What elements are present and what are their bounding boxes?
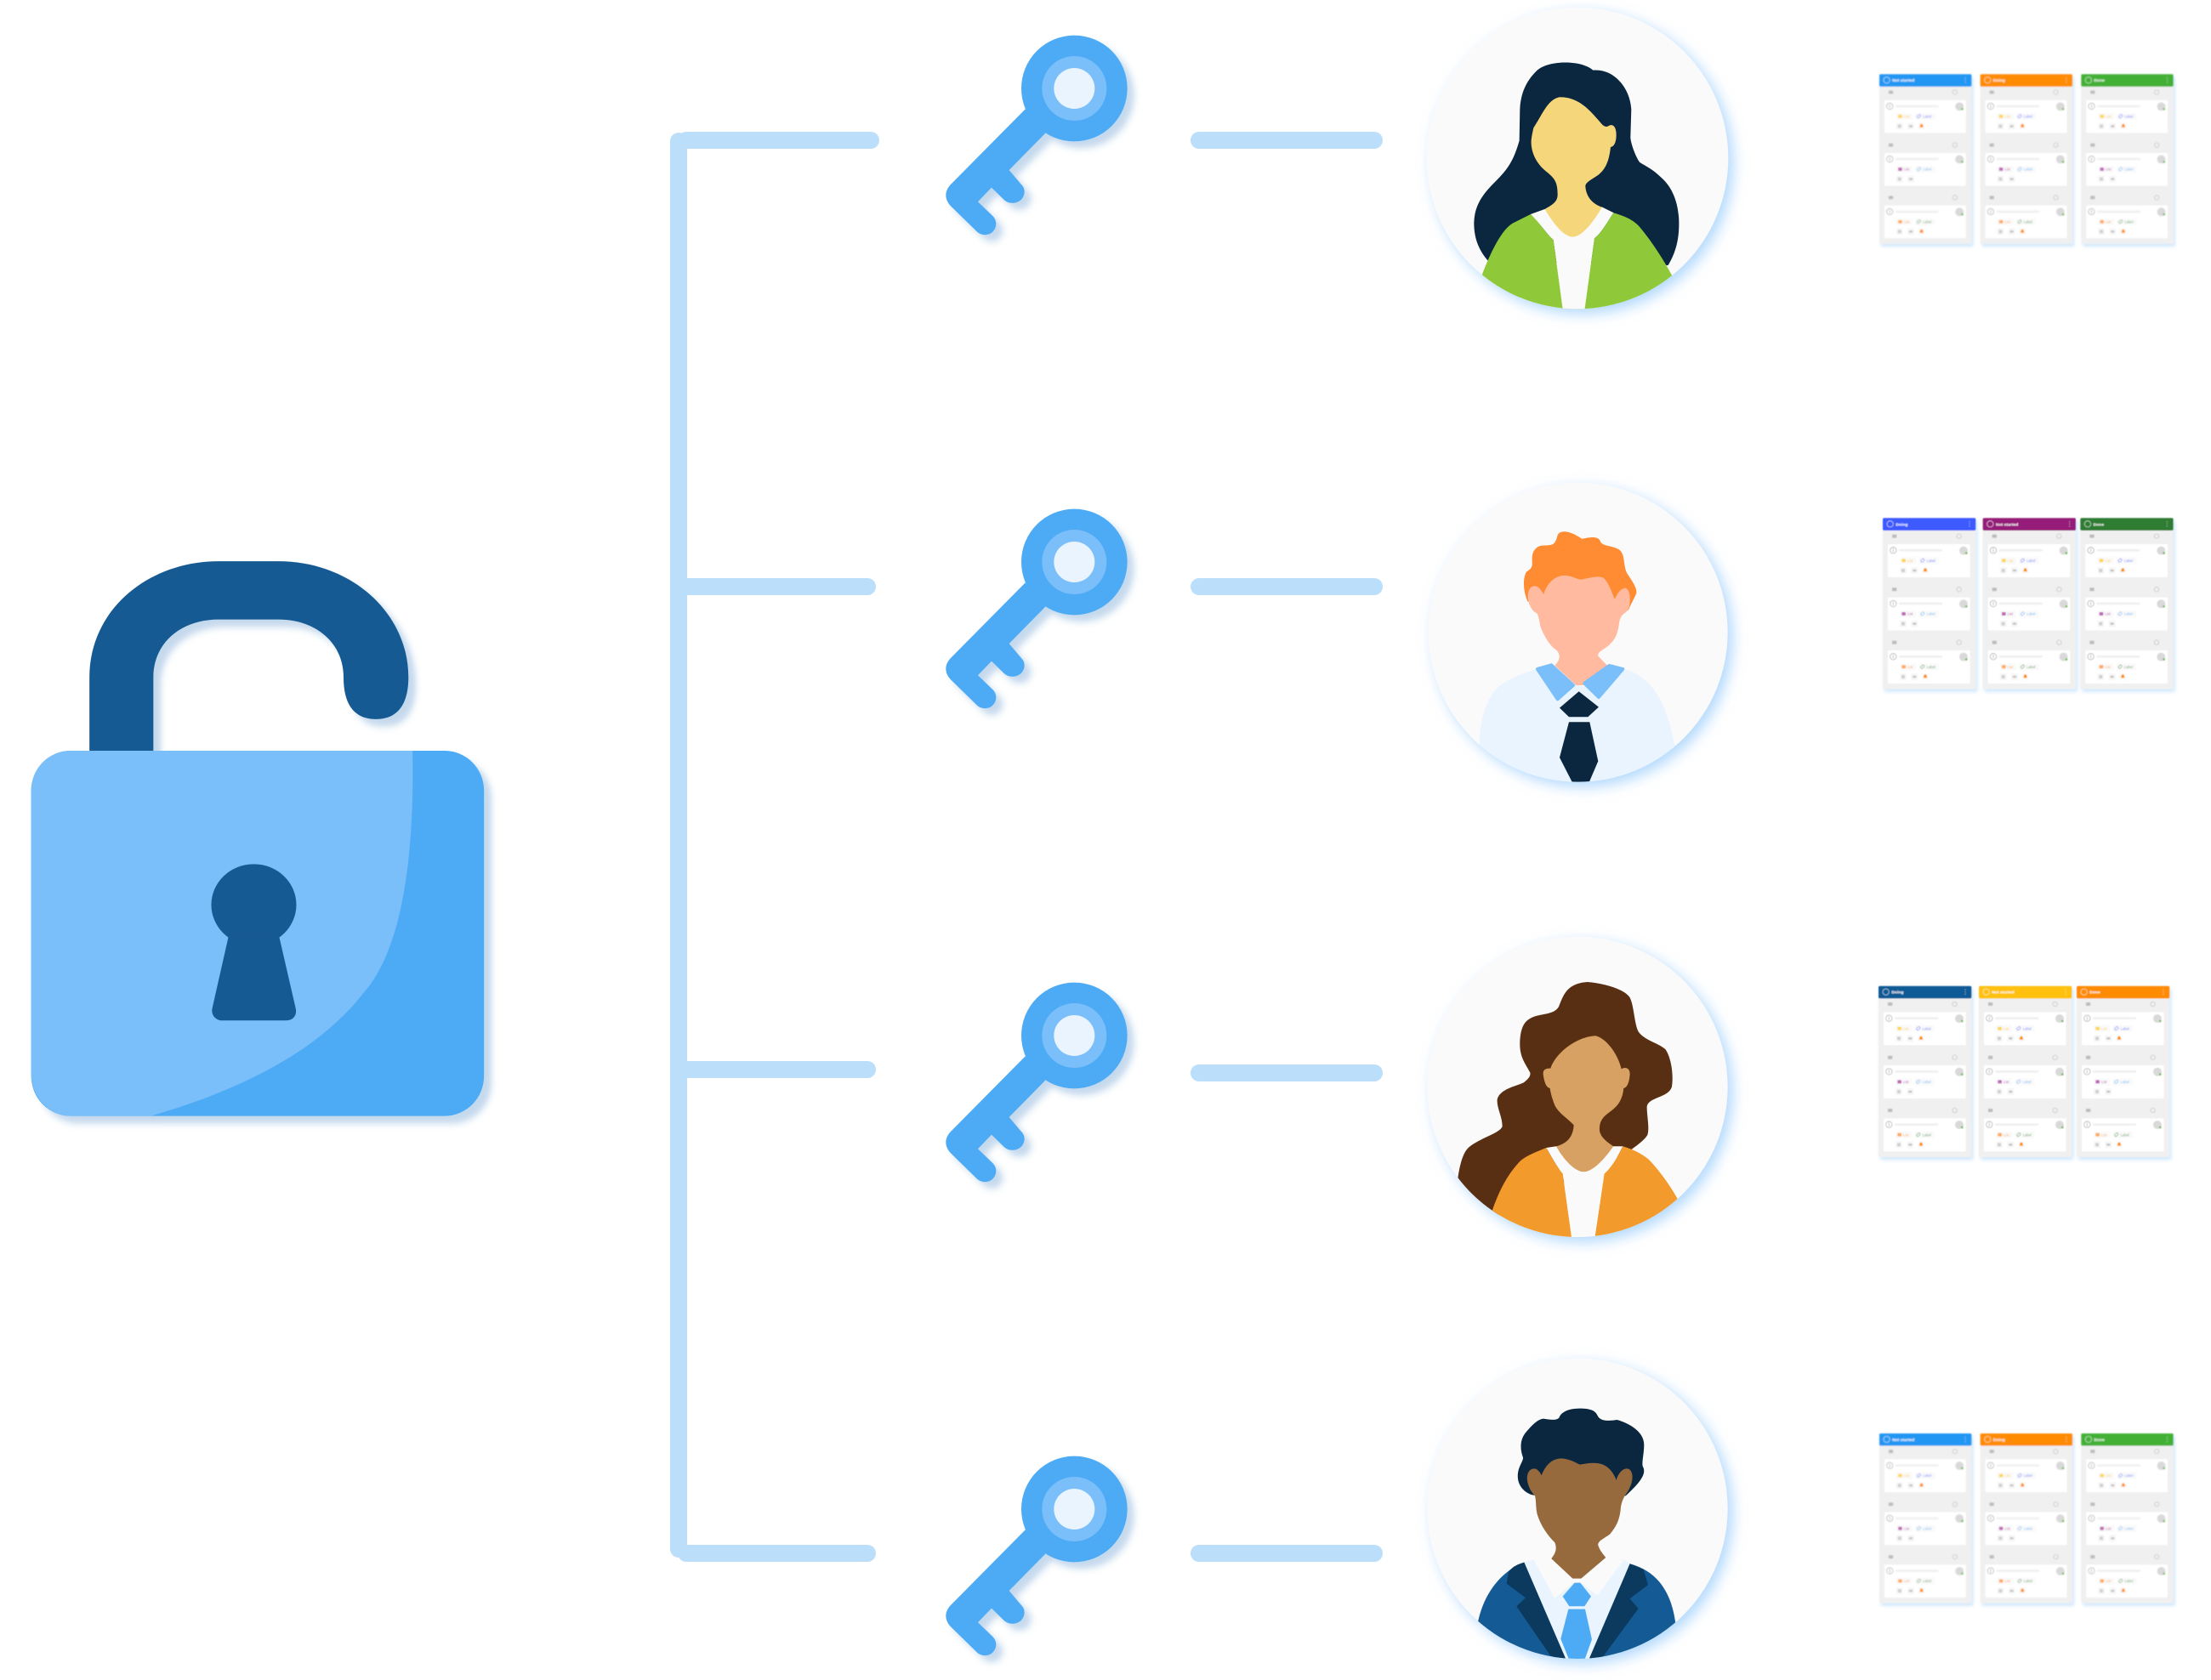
column: done (orange): List — [2101, 1132, 2107, 1137]
column: done (green) — [2081, 74, 2174, 244]
column: done (orange) — [2077, 986, 2169, 1157]
key 1 — [946, 36, 1128, 235]
column: not started (blue): Label — [1923, 1526, 1931, 1530]
board 4: three task columns — [1879, 1433, 2174, 1603]
column: not started (blue): Label — [1923, 167, 1931, 172]
key 4 — [946, 1456, 1128, 1655]
padlock — [31, 561, 484, 1116]
lock shackle — [89, 561, 408, 753]
key 3 — [946, 983, 1128, 1182]
column: not started (amber): Label — [2023, 1026, 2032, 1030]
column: not started (blue): List — [1904, 1579, 1910, 1583]
column: doing (navy): List — [1903, 1132, 1909, 1137]
column: not started (blue): Label — [1923, 1473, 1931, 1478]
column: done (orange): List — [2101, 1080, 2107, 1084]
column: doing (orange): Label — [2024, 167, 2032, 172]
column: done (green): List — [2106, 219, 2112, 224]
column: doing (orange): Label — [2024, 1526, 2032, 1530]
column: done (dark green) — [2080, 518, 2174, 690]
column: not started (amber): Not started — [1992, 990, 2015, 996]
column: not started (purple): Label — [2026, 612, 2036, 616]
column: doing (orange): List — [2004, 1473, 2011, 1478]
column: done (green): Label — [2125, 167, 2134, 172]
column: doing (orange): Label — [2024, 1473, 2032, 1478]
column: not started (amber): Label — [2023, 1132, 2032, 1137]
avatar: man in dark suit with blue tie — [1427, 1359, 1728, 1663]
column: doing (navy): Label — [1923, 1132, 1931, 1137]
column: done (dark green): List — [2105, 665, 2112, 669]
column: doing (indigo): Label — [1927, 665, 1935, 669]
column: not started (blue): List — [1904, 1473, 1910, 1478]
column: doing (navy): Label — [1923, 1026, 1931, 1030]
column: done (dark green): List — [2105, 559, 2112, 563]
column: not started (purple): Not started — [1996, 522, 2018, 527]
board 1: three task columns — [1879, 74, 2174, 244]
column: not started (amber): List — [2004, 1080, 2009, 1084]
column: not started (purple): Label — [2026, 665, 2036, 669]
column: done (green): Done — [2094, 1438, 2105, 1443]
board 3: three task columns — [1878, 986, 2169, 1157]
column: not started (purple): List — [2008, 612, 2014, 616]
avatar: woman with dark hair and green jacket — [1427, 8, 1728, 314]
column: doing (orange): Doing — [1993, 78, 2005, 83]
column: done (green): Label — [2125, 1526, 2134, 1530]
column: not started (blue): List — [1904, 219, 1910, 224]
column: done (green): List — [2106, 167, 2112, 172]
column: not started (blue): List — [1904, 1526, 1910, 1530]
column: doing (orange): List — [2004, 1579, 2011, 1583]
column: doing (indigo) — [1883, 518, 1975, 690]
column: not started (purple) — [1983, 518, 2076, 690]
connectors from keys to users — [1191, 132, 1383, 1562]
column: doing (orange): List — [2004, 115, 2011, 119]
column: not started (blue): Label — [1923, 219, 1931, 224]
column: done (dark green): List — [2105, 612, 2112, 616]
column: doing (orange): Label — [2024, 1579, 2032, 1583]
column: doing (orange): List — [2004, 1526, 2011, 1530]
column: done (green): List — [2106, 1579, 2112, 1583]
column: not started (purple): List — [2008, 665, 2014, 669]
avatar: woman with brown hair and orange jacket — [1427, 937, 1728, 1241]
avatar: man with orange hair and tie — [1429, 483, 1728, 789]
board 2: three task columns — [1883, 518, 2174, 690]
column: done (green): Label — [2125, 115, 2134, 119]
key 2 — [946, 509, 1128, 708]
column: doing (indigo): List — [1907, 665, 1913, 669]
column: not started (amber) — [1979, 986, 2072, 1157]
column: doing (navy): List — [1903, 1026, 1909, 1030]
column: done (green): Label — [2125, 219, 2134, 224]
column: not started (amber): Label — [2023, 1080, 2032, 1084]
column: not started (blue): List — [1904, 115, 1910, 119]
branching connector from lock to keys — [670, 132, 879, 1562]
column: done (green): List — [2106, 115, 2112, 119]
column: not started (blue): List — [1904, 167, 1910, 172]
column: doing (navy): Doing — [1891, 990, 1903, 996]
column: done (green) — [2081, 1433, 2174, 1603]
column: doing (orange) — [1981, 74, 2072, 244]
column: doing (indigo): List — [1907, 559, 1913, 563]
column: not started (purple): List — [2008, 559, 2014, 563]
column: done (green): Label — [2125, 1473, 2134, 1478]
column: not started (blue): Label — [1923, 1579, 1931, 1583]
column: doing (indigo): Label — [1927, 559, 1935, 563]
column: not started (blue) — [1879, 1433, 1971, 1603]
column: doing (orange) — [1981, 1433, 2072, 1603]
column: done (orange): Label — [2121, 1026, 2129, 1030]
column: doing (orange): List — [2004, 167, 2011, 172]
column: done (orange): List — [2101, 1026, 2107, 1030]
column: doing (indigo): List — [1907, 612, 1913, 616]
column: done (green): Done — [2094, 78, 2105, 83]
column: done (orange): Done — [2089, 990, 2100, 996]
column: done (green): List — [2106, 1526, 2112, 1530]
column: not started (amber): List — [2004, 1026, 2009, 1030]
column: not started (purple): Label — [2026, 559, 2036, 563]
column: not started (blue): Not started — [1892, 78, 1914, 83]
column: not started (blue) — [1879, 74, 1971, 244]
column: done (green): List — [2106, 1473, 2112, 1478]
column: not started (blue): Not started — [1892, 1438, 1914, 1443]
column: doing (orange): List — [2004, 219, 2011, 224]
column: doing (indigo): Label — [1927, 612, 1935, 616]
column: not started (amber): List — [2004, 1132, 2009, 1137]
column: doing (navy) — [1878, 986, 1971, 1157]
column: done (dark green): Label — [2124, 665, 2133, 669]
column: done (dark green): Label — [2124, 559, 2133, 563]
column: done (green): Label — [2125, 1579, 2134, 1583]
column: not started (blue): Label — [1923, 115, 1931, 119]
keyhole — [211, 864, 296, 1020]
column: doing (orange): Label — [2024, 219, 2032, 224]
column: doing (navy): Label — [1923, 1080, 1931, 1084]
column: doing (orange): Label — [2024, 115, 2032, 119]
column: done (orange): Label — [2121, 1080, 2129, 1084]
column: done (dark green): Done — [2094, 522, 2104, 527]
column: done (orange): Label — [2121, 1132, 2129, 1137]
column: done (dark green): Label — [2124, 612, 2133, 616]
column: doing (indigo): Doing — [1896, 522, 1907, 527]
lock body — [31, 751, 484, 1116]
column: doing (navy): List — [1903, 1080, 1909, 1084]
column: doing (orange): Doing — [1993, 1438, 2005, 1443]
